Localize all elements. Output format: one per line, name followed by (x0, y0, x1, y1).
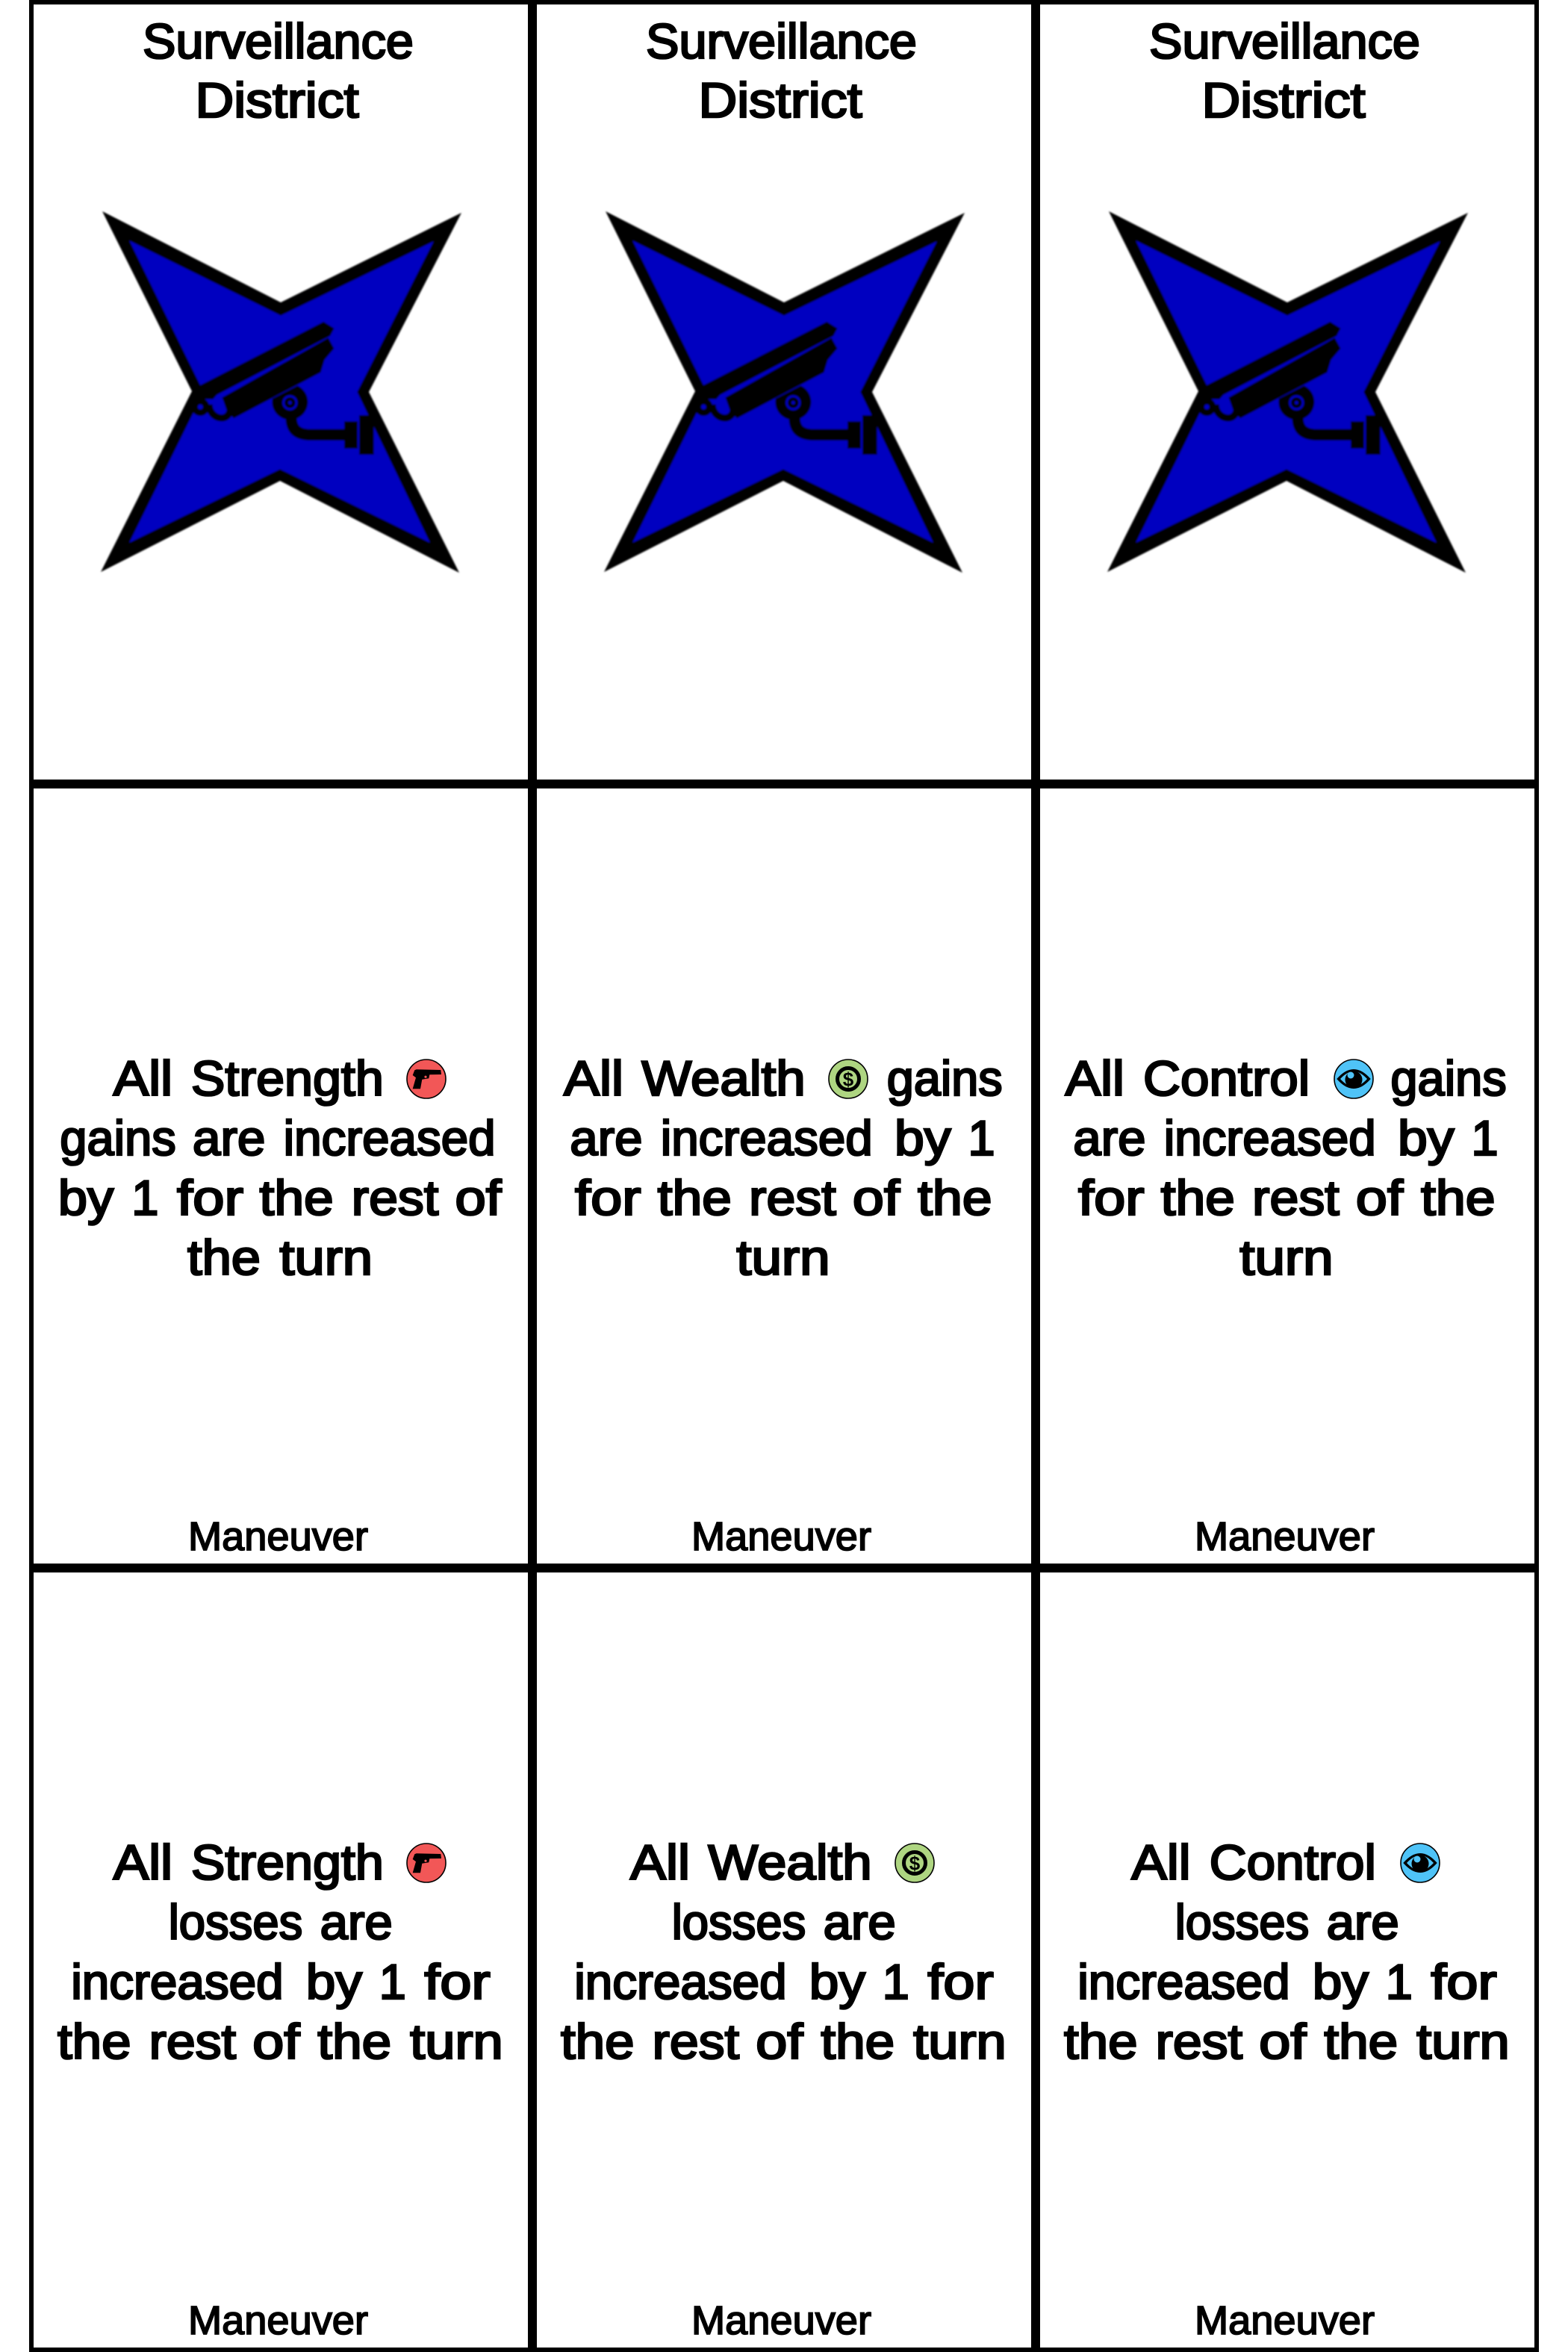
text: All Wealth losses are increased by 1 for the rest of the turn: increased (574, 1954, 787, 2009)
text: All Wealth gains are increased by 1 for the rest of the turn: of (853, 1170, 900, 1225)
text: All Strength gains are increased by 1 for the rest of the turn: of (455, 1170, 502, 1225)
text: All Control losses are increased by 1 for the rest of the turn: 1 (1386, 1954, 1413, 2009)
text: All Strength losses are increased by 1 for the rest of the turn: the (317, 2014, 391, 2069)
text: All Control gains are increased by 1 for the rest of the turn: increased (1164, 1110, 1376, 1166)
text: All Control losses are increased by 1 for the rest of the turn: losses (1175, 1894, 1309, 1950)
card: Wealth losses maneuver (535, 1570, 1033, 2350)
text: All Control gains are increased by 1 for the rest of the turn: Control (1143, 1051, 1310, 1106)
text: All Wealth gains are increased by 1 for the rest of the turn: rest (749, 1170, 836, 1225)
text: All Control gains are increased by 1 for the rest of the turn: gains (1390, 1051, 1507, 1106)
card: Strength losses maneuver (31, 1570, 530, 2350)
heading: Surveillance District: Surveillance (646, 13, 917, 69)
text: All Wealth gains are increased by 1 for the rest of the turn (564, 1051, 1003, 1285)
text: All Wealth losses are increased by 1 for the rest of the turn: 1 (883, 1954, 909, 2009)
text: All Strength gains are increased by 1 for the rest of the turn: gains (60, 1110, 176, 1166)
label: Maneuver: Maneuver (188, 1514, 368, 1559)
text: All Strength gains are increased by 1 for the rest of the turn: increased (284, 1110, 496, 1166)
text: All Control losses are increased by 1 for the rest of the turn: rest (1156, 2014, 1242, 2069)
text: All Strength losses are increased by 1 for the rest of the turn: of (252, 2014, 300, 2069)
text: All Strength losses are increased by 1 for the rest of the turn: rest (149, 2014, 236, 2069)
icon: wealth coin (829, 1060, 868, 1098)
text: All Control gains are increased by 1 for the rest of the turn: All (1065, 1051, 1124, 1106)
text: All Strength losses are increased by 1 for the rest of the turn: 1 (379, 1954, 406, 2009)
text: All Strength gains are increased by 1 for the rest of the turn: for (177, 1170, 243, 1225)
label: Maneuver: Maneuver (691, 2298, 871, 2343)
text: All Strength gains are increased by 1 for the rest of the turn: by (58, 1170, 113, 1225)
card: Surveillance District, column 1 (31, 2, 530, 782)
icon: wealth coin: $ (909, 1852, 921, 1874)
text: All Strength losses are increased by 1 for the rest of the turn: for (424, 1954, 491, 2009)
text: All Wealth losses are increased by 1 for the rest of the turn: turn (913, 2014, 1007, 2069)
text: All Strength gains are increased by 1 for the rest of the turn: 1 (131, 1170, 158, 1225)
heading: Surveillance District: District (699, 72, 862, 128)
heading: Surveillance District (143, 13, 414, 128)
text: All Control gains are increased by 1 for the rest of the turn: of (1356, 1170, 1404, 1225)
text: All Strength losses are increased by 1 for the rest of the turn: All (113, 1835, 172, 1890)
icon: strength pistol (407, 1844, 446, 1882)
heading: Surveillance District: District (196, 72, 358, 128)
label: Maneuver: Maneuver (188, 2298, 368, 2343)
card: Control losses maneuver (1038, 1570, 1537, 2350)
text: All Wealth gains are increased by 1 for the rest of the turn: are (570, 1110, 642, 1166)
heading: Surveillance District (1149, 13, 1420, 128)
text: All Control gains are increased by 1 for the rest of the turn: are (1073, 1110, 1145, 1166)
card: Strength gains maneuver (31, 786, 530, 1566)
text: All Wealth gains are increased by 1 for the rest of the turn: All (564, 1051, 623, 1106)
text: All Wealth losses are increased by 1 for the rest of the turn: the (561, 2014, 635, 2069)
text: All Control losses are increased by 1 for the rest of the turn: for (1431, 1954, 1497, 2009)
label: Maneuver: Maneuver (691, 1514, 871, 1559)
text: All Wealth losses are increased by 1 for the rest of the turn: are (824, 1894, 896, 1950)
text: All Wealth losses are increased by 1 for the rest of the turn: rest (653, 2014, 739, 2069)
text: All Wealth gains are increased by 1 for the rest of the turn: Wealth (641, 1051, 806, 1106)
text: All Wealth losses are increased by 1 for the rest of the turn: Wealth (708, 1835, 872, 1890)
text: All Strength gains are increased by 1 for the rest of the turn: All (113, 1051, 172, 1106)
text: All Strength gains are increased by 1 for the rest of the turn: rest (352, 1170, 438, 1225)
text: All Strength losses are increased by 1 for the rest of the turn: turn (410, 2014, 503, 2069)
label: Maneuver: Maneuver (1195, 2298, 1375, 2343)
card: Control gains maneuver (1038, 786, 1537, 1566)
text: All Strength gains are increased by 1 for the rest of the turn: the (260, 1170, 334, 1225)
heading: Surveillance District: District (1202, 72, 1365, 128)
card: Surveillance District, column 2 (535, 2, 1033, 782)
text: All Strength gains are increased by 1 for the rest of the turn: the (187, 1230, 261, 1285)
text: All Control losses are increased by 1 for the rest of the turn: are (1327, 1894, 1399, 1950)
text: All Control losses are increased by 1 for the rest of the turn: the (1064, 2014, 1138, 2069)
text: All Wealth losses are increased by 1 for the rest of the turn: the (821, 2014, 895, 2069)
text: All Control losses are increased by 1 for the rest of the turn: by (1313, 1954, 1369, 2009)
text: All Wealth losses are increased by 1 for the rest of the turn: of (756, 2014, 803, 2069)
text: All Control gains are increased by 1 for the rest of the turn: the (1161, 1170, 1235, 1225)
text: All Wealth losses are increased by 1 for the rest of the turn: All (630, 1835, 690, 1890)
text: All Wealth gains are increased by 1 for the rest of the turn: gains (887, 1051, 1003, 1106)
text: All Wealth losses are increased by 1 for the rest of the turn: for (927, 1954, 994, 2009)
text: All Control losses are increased by 1 for the rest of the turn: Control (1210, 1835, 1376, 1890)
heading: Surveillance District: Surveillance (143, 13, 414, 69)
text: All Wealth gains are increased by 1 for the rest of the turn: by (895, 1110, 951, 1166)
text: All Strength losses are increased by 1 for the rest of the turn: increased (71, 1954, 284, 2009)
icon: control eye (1334, 1060, 1373, 1098)
text: All Wealth gains are increased by 1 for the rest of the turn: increased (661, 1110, 873, 1166)
text: All Strength gains are increased by 1 for the rest of the turn (58, 1051, 502, 1285)
text: All Strength losses are increased by 1 for the rest of the turn (57, 1835, 503, 2069)
heading: Surveillance District (646, 13, 917, 128)
icon: blue star with security camera (101, 211, 461, 573)
text: All Control gains are increased by 1 for the rest of the turn: 1 (1471, 1110, 1499, 1166)
text: All Strength losses are increased by 1 for the rest of the turn: Strength (191, 1835, 384, 1890)
icon: blue star with security camera (604, 211, 965, 573)
text: All Control losses are increased by 1 for the rest of the turn: increased (1077, 1954, 1290, 2009)
icon: blue star with security camera (1107, 211, 1468, 573)
icon: wealth coin (895, 1844, 934, 1882)
icon: wealth coin: $ (843, 1068, 854, 1090)
text: All Wealth gains are increased by 1 for the rest of the turn: 1 (968, 1110, 995, 1166)
text: All Strength gains are increased by 1 for the rest of the turn: are (193, 1110, 266, 1166)
text: All Strength losses are increased by 1 for the rest of the turn: losses (169, 1894, 302, 1950)
text: All Control gains are increased by 1 for the rest of the turn (1065, 1051, 1507, 1285)
text: All Control losses are increased by 1 for the rest of the turn: of (1259, 2014, 1307, 2069)
text: All Wealth losses are increased by 1 for the rest of the turn: losses (672, 1894, 806, 1950)
text: All Wealth losses are increased by 1 for the rest of the turn (561, 1835, 1007, 2069)
card: Wealth gains maneuver (535, 786, 1033, 1566)
text: All Wealth gains are increased by 1 for the rest of the turn: turn (736, 1230, 830, 1285)
text: All Wealth gains are increased by 1 for the rest of the turn: the (918, 1170, 992, 1225)
text: All Control gains are increased by 1 for the rest of the turn: for (1078, 1170, 1144, 1225)
text: All Control gains are increased by 1 for the rest of the turn: rest (1252, 1170, 1340, 1225)
label: Maneuver: Maneuver (1195, 1514, 1375, 1559)
card: Surveillance District, column 3 (1038, 2, 1537, 782)
text: All Control gains are increased by 1 for the rest of the turn: turn (1239, 1230, 1334, 1285)
text: All Wealth gains are increased by 1 for the rest of the turn: the (658, 1170, 732, 1225)
text: All Strength gains are increased by 1 for the rest of the turn: turn (279, 1230, 373, 1285)
text: All Control losses are increased by 1 for the rest of the turn: All (1131, 1835, 1191, 1890)
icon: control eye (1401, 1844, 1440, 1882)
text: All Strength gains are increased by 1 for the rest of the turn: Strength (191, 1051, 384, 1106)
text: All Wealth gains are increased by 1 for the rest of the turn: for (575, 1170, 641, 1225)
text: All Strength losses are increased by 1 for the rest of the turn: by (306, 1954, 362, 2009)
text: All Control losses are increased by 1 for the rest of the turn: the (1324, 2014, 1398, 2069)
text: All Control losses are increased by 1 for the rest of the turn: turn (1416, 2014, 1510, 2069)
text: All Wealth losses are increased by 1 for the rest of the turn: by (809, 1954, 865, 2009)
text: All Control gains are increased by 1 for the rest of the turn: by (1398, 1110, 1455, 1166)
text: All Control losses are increased by 1 for the rest of the turn (1064, 1835, 1510, 2069)
heading: Surveillance District: Surveillance (1149, 13, 1420, 69)
icon: strength pistol (407, 1060, 446, 1098)
text: All Strength losses are increased by 1 for the rest of the turn: are (320, 1894, 393, 1950)
text: All Control gains are increased by 1 for the rest of the turn: the (1421, 1170, 1496, 1225)
text: All Strength losses are increased by 1 for the rest of the turn: the (57, 2014, 131, 2069)
